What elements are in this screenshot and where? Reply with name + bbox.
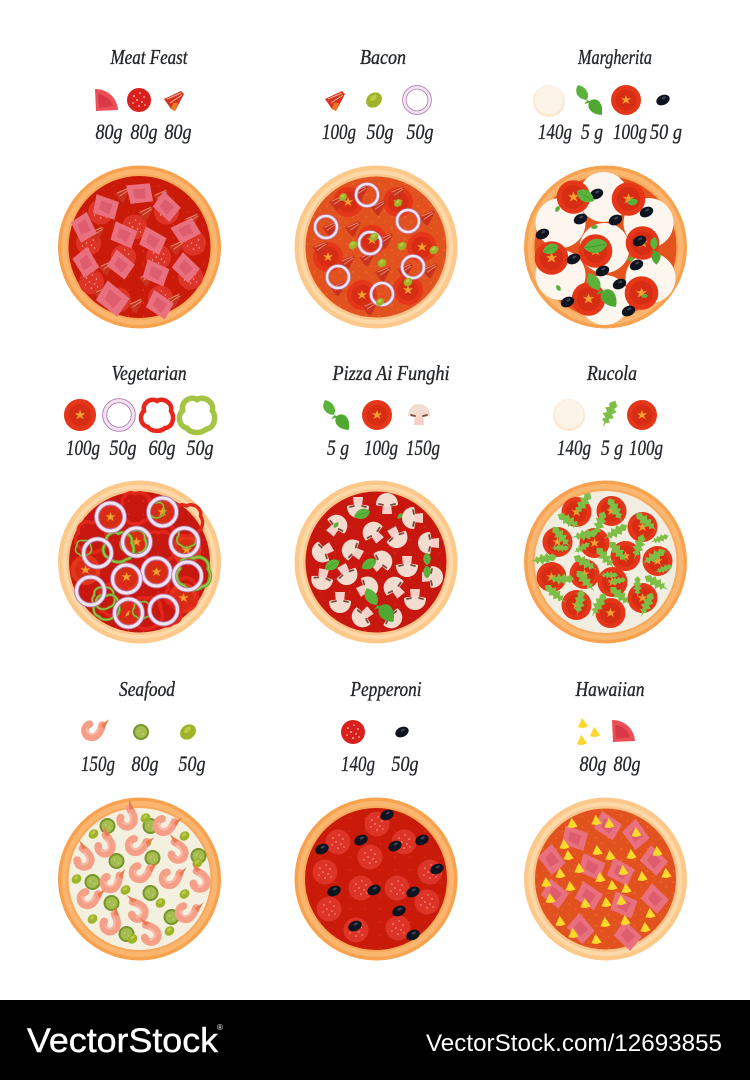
weights: 150g (81, 751, 115, 776)
pizza (524, 798, 687, 960)
weights (341, 751, 418, 776)
ingredient icons (325, 87, 430, 113)
footer bar (0, 1000, 750, 1080)
panel: Margherita (524, 45, 687, 328)
weights: 50g (366, 119, 394, 144)
pizza (58, 798, 221, 960)
heading: Seafood (119, 677, 175, 701)
weights: 100g (322, 119, 356, 144)
pizza (58, 166, 221, 328)
weights (538, 119, 682, 144)
pizza (294, 480, 458, 644)
weights: 5 g (601, 435, 623, 460)
weights: 50g (392, 751, 418, 776)
weights: 5 g (581, 119, 603, 144)
panel: Pepperoni (294, 677, 458, 960)
heading: Meat Feast (110, 45, 188, 69)
footer url: VectorStock.com/12693855 (426, 1030, 722, 1057)
weights (580, 751, 640, 776)
ingredient icons (85, 719, 199, 743)
ingredient icons (64, 398, 215, 432)
weights: 50 g (650, 119, 682, 144)
panel: Vegetarian (58, 361, 221, 644)
weights: 50g (110, 435, 136, 460)
weights: 100g (66, 435, 100, 460)
weights: 5 g (327, 435, 349, 460)
weights (327, 435, 440, 460)
ingredient icons (577, 718, 635, 745)
registered mark: ® (217, 1023, 223, 1032)
ingredient icons (341, 720, 410, 744)
weights (66, 435, 214, 460)
weights: 80g (96, 119, 122, 144)
panel: Bacon (294, 45, 458, 328)
weights: 80g (164, 119, 192, 144)
weights (322, 119, 434, 144)
weights: 100g (613, 119, 647, 144)
pizza (58, 480, 221, 644)
footer logo: VectorStock (27, 1022, 219, 1060)
weights (557, 435, 663, 460)
ingredient icons (323, 400, 430, 430)
ingredient icons (533, 85, 671, 117)
heading: Pepperoni (350, 677, 422, 701)
pizza (294, 166, 458, 328)
panel: Rucola (524, 361, 687, 644)
pizza (294, 798, 458, 960)
weights (81, 751, 206, 776)
heading: Vegetarian (112, 361, 186, 385)
heading: Hawaiian (575, 677, 644, 701)
heading: Pizza Ai Funghi (332, 361, 450, 385)
weights: 50g (186, 435, 214, 460)
pizza (524, 480, 687, 644)
weights: 80g (580, 751, 606, 776)
weights: 80g (132, 751, 158, 776)
pizza (524, 166, 687, 328)
weights: 140g (538, 119, 572, 144)
heading: Bacon (360, 45, 406, 69)
ingredient icons (95, 88, 184, 112)
weights: 140g (557, 435, 591, 460)
panel: Hawaiian (524, 677, 687, 960)
weights: 60g (148, 435, 176, 460)
weights: 50g (406, 119, 434, 144)
weights: 100g (629, 435, 663, 460)
weights: 140g (341, 751, 375, 776)
heading: Margherita (577, 45, 652, 69)
weights: 50g (178, 751, 206, 776)
panel: Meat Feast (58, 45, 221, 328)
ingredient icons (553, 398, 657, 431)
weights: 150g (406, 435, 440, 460)
heading: Rucola (586, 361, 637, 385)
weights: 80g (130, 119, 158, 144)
weights: 100g (364, 435, 398, 460)
weights: 80g (614, 751, 640, 776)
weights (96, 119, 192, 144)
panel: Pizza Ai Funghi (294, 361, 458, 644)
panel: Seafood (58, 677, 221, 960)
